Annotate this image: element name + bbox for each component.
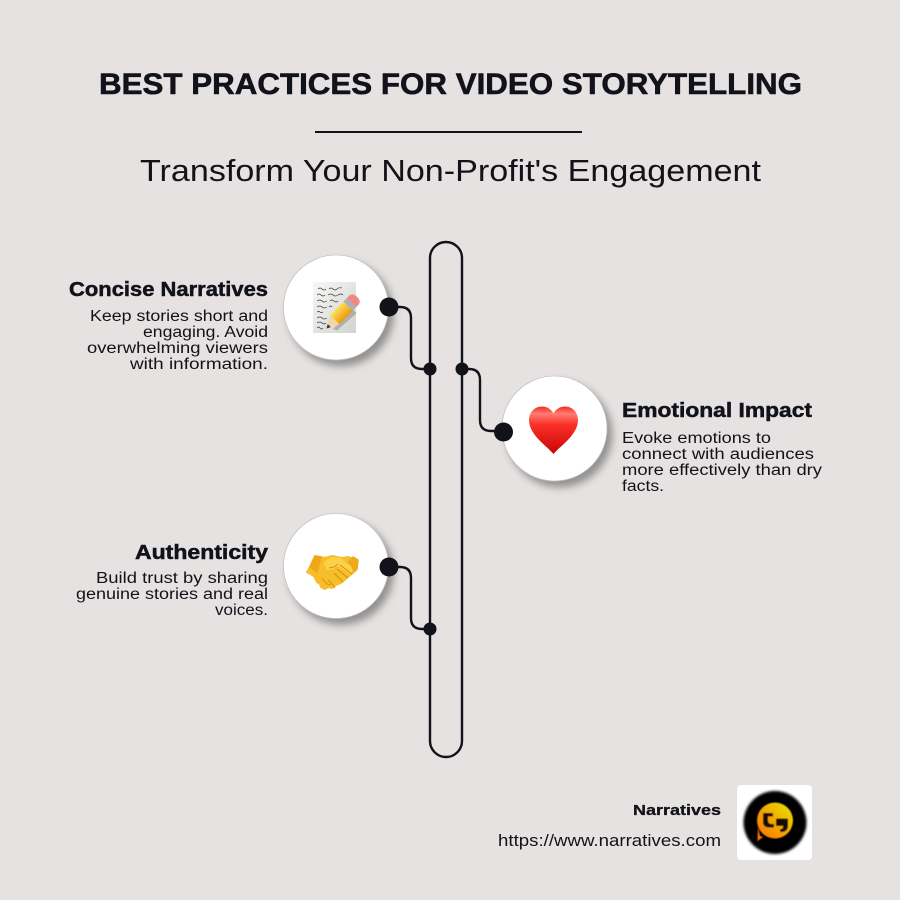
connector	[380, 298, 436, 376]
panel: emotional impact	[456, 362, 822, 495]
icon circle: memo	[284, 255, 388, 360]
text: concise narratives description	[87, 308, 268, 373]
heading: concise narratives: Concise Narratives	[69, 279, 268, 301]
footer: brand	[498, 785, 812, 860]
text: concise narratives description: with information.	[129, 356, 268, 373]
text: emotional impact description: facts.	[622, 478, 664, 495]
central timeline track	[430, 242, 462, 757]
panel: concise narratives	[69, 255, 436, 376]
text: emotional impact description: connect with audiences	[622, 446, 814, 463]
subtitle: Transform Your Non-Profit's Engagement	[140, 153, 761, 188]
logo	[737, 785, 812, 860]
pencil	[322, 292, 365, 336]
connector	[456, 362, 513, 442]
title: BEST PRACTICES FOR VIDEO STORYTELLING	[99, 68, 802, 101]
connector	[380, 558, 436, 636]
heading: authenticity: Authenticity	[135, 542, 269, 564]
text: authenticity description	[76, 570, 268, 619]
text: concise narratives description: Keep stories short and	[90, 308, 268, 325]
panel: authenticity	[76, 514, 436, 636]
heading: emotional impact: Emotional Impact	[622, 400, 812, 422]
website url: https://www.narratives.com	[498, 831, 721, 850]
icon circle: heart	[502, 376, 607, 481]
brand name: Narratives	[633, 802, 721, 819]
icon circle: handshake	[284, 514, 388, 618]
text: emotional impact description: Evoke emotions to	[622, 430, 771, 447]
text: emotional impact description: more effectively than dry	[622, 462, 822, 479]
text: emotional impact description	[622, 430, 822, 495]
text: authenticity description: Build trust by sharing	[96, 570, 268, 587]
text: concise narratives description: engaging. Avoid	[143, 324, 268, 341]
text: concise narratives description: overwhelming viewers	[87, 340, 268, 357]
text: authenticity description: voices.	[215, 602, 268, 619]
text: authenticity description: genuine stories and real	[76, 586, 268, 603]
